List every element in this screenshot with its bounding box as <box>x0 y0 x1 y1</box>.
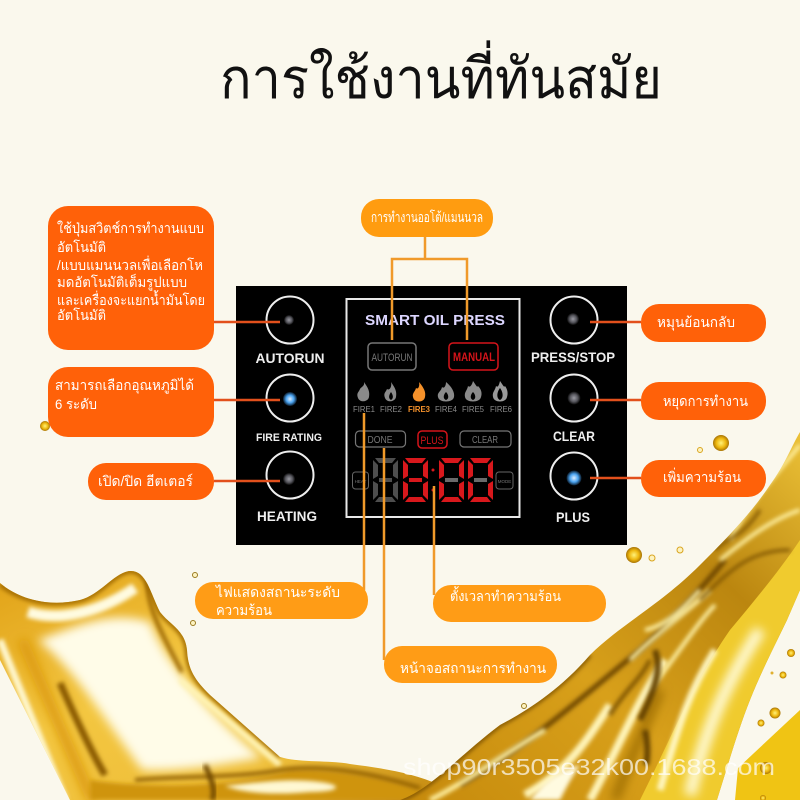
button: plus <box>550 452 598 525</box>
plus badge <box>418 431 447 448</box>
callout: autorun explanation: ใช้ปุ่มสวิตช์การทำงานแบบ <box>57 220 204 237</box>
callout: set heating time <box>433 585 606 622</box>
mode badge: MODE <box>498 479 511 484</box>
display frame <box>346 299 520 517</box>
callout: stop <box>641 382 766 420</box>
callout: add heat <box>641 460 766 497</box>
fire level labels: FIRE2 <box>380 405 403 414</box>
callout: temperature levels: สามารถเลือกอุณหภูมิได้ <box>55 377 194 394</box>
right oil splash <box>400 430 800 800</box>
oil droplets <box>40 421 795 800</box>
callout: temperature levels: 6 ระดับ <box>55 396 97 412</box>
callout: autorun explanation: และเครื่องจะแยกน้ำมันโดย <box>57 290 205 308</box>
callout: heater on off <box>88 463 214 500</box>
control panel <box>236 286 627 545</box>
red connector lines <box>214 322 641 481</box>
fire level labels: FIRE3 <box>408 405 431 414</box>
callout: autorun explanation: อัตโนมัติ <box>57 239 106 255</box>
fire level labels <box>353 405 513 414</box>
callout: autorun explanation <box>48 206 214 350</box>
button: clear: CLEAR <box>553 428 595 444</box>
clear badge <box>460 431 511 447</box>
callout: auto manual <box>361 199 493 237</box>
orange connector lines <box>364 237 467 660</box>
callout: add heat: เพิ่มความร้อน <box>663 468 741 485</box>
callout: working status screen: หน้าจอสถานะการทำงาน <box>400 660 546 676</box>
display heading: SMART OIL PRESS <box>365 312 505 329</box>
callout: reverse <box>641 304 766 342</box>
heat badge: HEAT <box>355 479 367 484</box>
callout: heater on off: เปิด/ปิด ฮีตเตอร์ <box>98 473 193 489</box>
button: fire rating <box>256 374 322 444</box>
clear badge: CLEAR <box>472 435 498 446</box>
yellow corner <box>735 710 800 800</box>
callout: autorun explanation: /แบบแมนนวลเพื่อเลือกโห <box>57 256 203 273</box>
callout: heat level light: ความร้อน <box>216 602 272 618</box>
plus badge: PLUS <box>420 435 444 447</box>
title: การใช้งานที่ทันสมัย <box>220 40 662 110</box>
done badge <box>356 431 406 447</box>
callout: autorun explanation: อัตโนมัติ <box>57 307 106 323</box>
button: press/stop <box>531 296 615 365</box>
callout: temperature levels <box>48 367 214 437</box>
callout: autorun explanation: มดอัตโนมัติเต็มรูปแบบ <box>57 273 187 291</box>
fire level icons <box>357 381 508 402</box>
button: autorun: AUTORUN <box>256 350 324 366</box>
fire level labels: FIRE1 <box>353 405 376 414</box>
callout: working status screen <box>384 646 557 683</box>
button: press/stop: PRESS/STOP <box>531 349 615 365</box>
autorun badge <box>368 343 416 370</box>
done badge: DONE <box>368 435 393 446</box>
callout: auto manual: การทำงานออโต้/แมนนวล <box>371 209 483 225</box>
callout: heat level light: ไฟแสดงสถานะระดับ <box>215 584 340 600</box>
fire level labels: FIRE5 <box>462 405 485 414</box>
callout: heat level light <box>195 582 368 619</box>
callout: stop: หยุดการทำงาน <box>663 393 748 410</box>
button: fire rating: FIRE RATING <box>256 432 322 444</box>
button: heating: HEATING <box>257 508 317 524</box>
button: plus: PLUS <box>556 509 590 525</box>
fire level labels: FIRE4 <box>435 405 458 414</box>
heat badge <box>352 472 368 489</box>
manual badge <box>449 343 498 370</box>
button: heating <box>257 452 317 524</box>
left oil splash <box>0 571 432 800</box>
seven segment display <box>373 458 493 502</box>
mode badge <box>496 472 513 489</box>
manual badge: MANUAL <box>453 350 495 364</box>
callout: reverse: หมุนย้อนกลับ <box>657 314 735 331</box>
button: clear <box>550 374 598 444</box>
autorun badge: AUTORUN <box>372 352 413 364</box>
watermark: shop90r3505e32k00.1688.com <box>403 754 775 780</box>
fire level labels: FIRE6 <box>490 405 513 414</box>
callout: set heating time: ตั้งเวลาทำความร้อน <box>450 586 561 604</box>
button: autorun <box>256 296 324 366</box>
